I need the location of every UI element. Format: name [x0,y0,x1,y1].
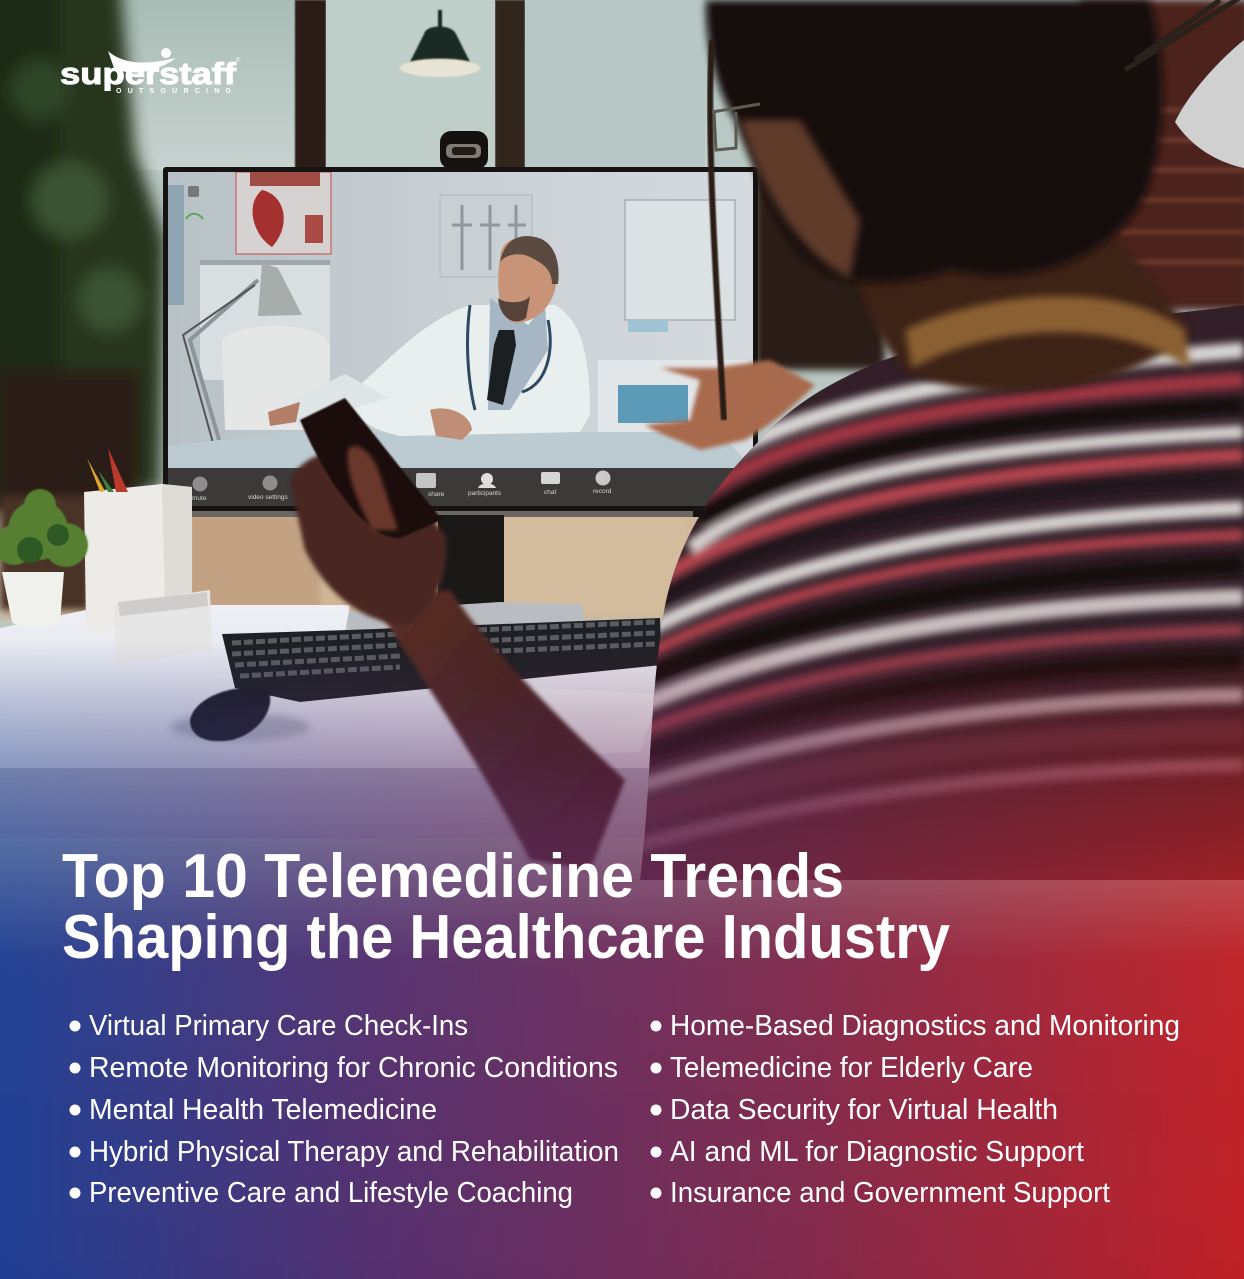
webcam [440,131,488,174]
bullet list: left column: Hybrid Physical Therapy and Rehabilitation [89,1136,619,1168]
bullet list: right column: Data Security for Virtual Health [670,1094,1058,1126]
title: Shaping the Healthcare Industry [62,903,950,972]
hair [706,0,1162,282]
far wall panel [625,200,735,320]
bullet list: right column: AI and ML for Diagnostic Support [670,1136,1084,1168]
video call screen: share [428,491,445,498]
heart poster [236,172,331,254]
brick wall right [1080,0,1244,310]
right lamp [1125,0,1244,70]
room floor and shelving behind the monitor [0,510,700,620]
glasses [712,104,760,150]
shelf [168,185,184,305]
small box [114,590,212,665]
skeleton poster [440,195,532,277]
desk surface [168,432,753,470]
pendant lamp [400,10,480,77]
bullet list: left column: Preventive Care and Lifestyle Coaching [89,1177,573,1209]
doctor [268,236,590,440]
video call screen: record [593,488,612,495]
colour gradient overlay [0,640,1244,1279]
monitor stand [438,515,504,615]
zoom toolbar [168,468,753,506]
bullet list: left column [70,1010,619,1209]
desk lamp [183,280,258,450]
woman [290,0,1244,880]
logo [60,48,241,95]
pencil cup [84,484,192,634]
monitor [163,167,758,632]
potted plant [0,489,88,628]
bullet list: right column: Home-Based Diagnostics and Monitoring [670,1010,1180,1042]
logo: OUTSOURCING [116,88,232,95]
torso and shirt [640,305,1244,880]
video call screen [168,172,753,506]
neck and collar [850,240,1190,392]
video call screen: mute [192,495,207,502]
desk [0,605,680,780]
title [62,842,950,972]
other hand [645,360,815,450]
logo: ® [236,57,241,64]
bullet list: left column: Remote Monitoring for Chronic Conditions [89,1052,618,1084]
video call screen: video settings [248,494,288,501]
bullet list: left column: Mental Health Telemedicine [89,1094,437,1126]
bullet list: right column: Telemedicine for Elderly Care [670,1052,1033,1084]
bullet list: left column: Virtual Primary Care Check-Ins [89,1010,468,1042]
video call screen: participants [468,490,502,497]
keyboard [222,618,662,702]
logo: superstaff [60,56,237,91]
notebook [500,686,660,755]
mouse [170,713,310,741]
plant backdrop [0,0,165,520]
title: Top 10 Telemedicine Trends [62,842,844,911]
arm with bottle [372,590,625,870]
chair [222,326,330,430]
video call screen: chat [544,489,556,496]
bullet list: right column: Insurance and Government Support [670,1177,1110,1209]
bullet list: right column [650,1010,1180,1209]
desk items [0,448,680,838]
